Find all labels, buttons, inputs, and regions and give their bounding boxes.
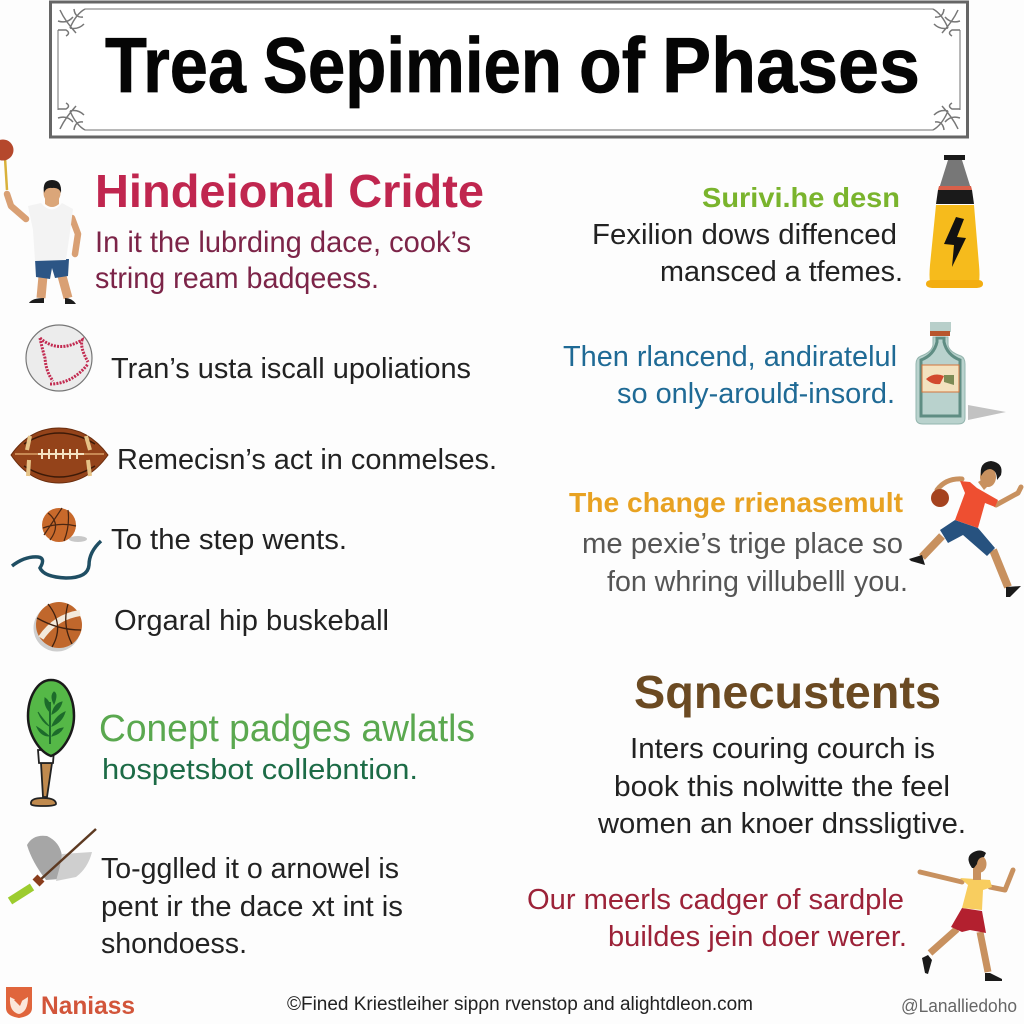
panel: Our meerls cadger: Our meerls cadger of sardple (527, 884, 904, 916)
body text: fon whring villubel‖ you. (607, 566, 908, 598)
body text: book this nolwitte the feel (614, 771, 950, 803)
panel: Surivi.he desn (592, 182, 905, 288)
icon: yellow bottle with lightning (926, 155, 983, 288)
corner ornaments (58, 9, 960, 130)
body text: me pexie’s trige place so (582, 528, 903, 560)
title text: Sepimien (263, 21, 562, 109)
body text: Fexilion dows diffenced (592, 219, 897, 251)
icon: green leaf paddle (28, 680, 74, 806)
text: step row: To the step wents. (111, 524, 347, 556)
body text: women an knoer dnssligtive. (597, 808, 966, 840)
icon: glass bottle with label (916, 322, 1006, 424)
footer credit: ©Fined Kriestleiher sipρn rvenstop and alightdleon.com (287, 994, 753, 1015)
icon: stitched basketball (34, 602, 82, 652)
panel: Hindeional Cridte (95, 165, 484, 295)
icon: football (11, 428, 108, 483)
icon: running basketball player (909, 461, 1021, 597)
panel: Sqnecustents (597, 666, 966, 840)
icon: running figure (920, 850, 1013, 981)
panel: Then rlancend: so only-aroulđ-insord. (617, 378, 895, 410)
panel: Then rlancend: Then rlancend, andiratelul (563, 341, 897, 373)
icon: baseball (26, 325, 92, 391)
title text: of (579, 21, 646, 109)
body text: string ream badqeess. (95, 262, 379, 295)
text: baseball row: Tran’s usta iscall upoliations (111, 353, 471, 385)
subheading: hospetsbot collebntion. (102, 754, 418, 786)
body text: In it the lubrding dace, cook’s (95, 226, 471, 259)
heading: Sqnecustents (634, 666, 941, 718)
icon: man holding paddle (0, 140, 78, 304)
title banner (50, 2, 968, 137)
panel: The change rrienasemult (569, 487, 911, 598)
panel: Our meerls cadger: buildes jein doer werer. (608, 921, 907, 953)
body text: Inters couring courch is (630, 733, 935, 765)
panel: Conept padges awlatls (99, 708, 475, 786)
text: football row: Remecisn’s act in conmelses. (117, 444, 497, 476)
icon: dart with feathers (10, 829, 96, 901)
heading: The change rrienasemult (569, 487, 903, 518)
heading: Surivi.he desn (702, 182, 900, 213)
body text: mansced a tfemes. (660, 256, 903, 288)
title text: Phases (662, 21, 920, 109)
text: dart block: shondoess. (101, 928, 247, 960)
brand name: Naniass (41, 992, 135, 1020)
text: dart block: To-gglled it o arnowel is (101, 853, 399, 885)
icon: basketball and rope (12, 508, 101, 578)
footer logo (6, 987, 135, 1020)
heading: Conept padges awlatls (99, 708, 475, 750)
text: basketball row: Orgaral hip buskeball (114, 605, 389, 637)
footer handle: @Lanalliedoho (901, 996, 1017, 1016)
icon: shield logo (6, 987, 32, 1018)
heading: Hindeional Cridte (95, 165, 484, 217)
text: dart block: pent ir the dace xt int is (101, 891, 403, 923)
title text: Trea (105, 21, 247, 109)
